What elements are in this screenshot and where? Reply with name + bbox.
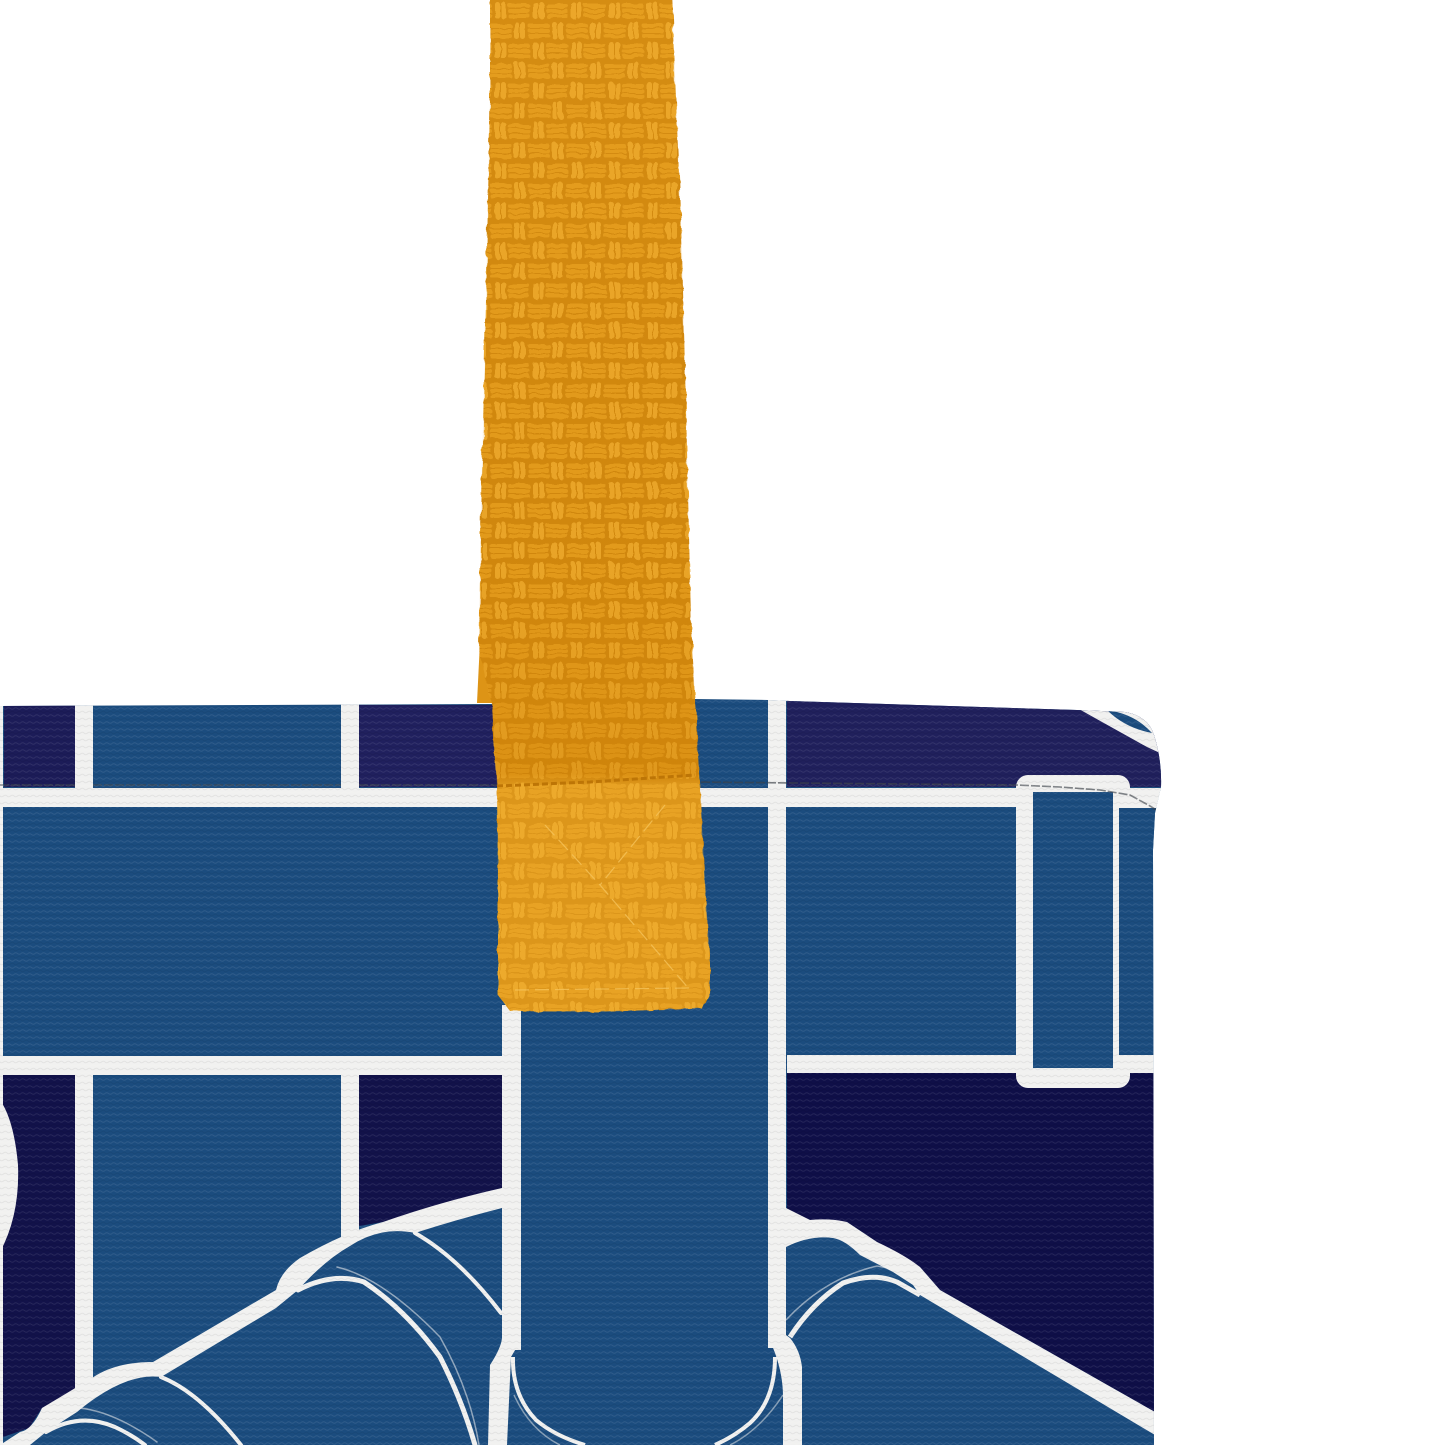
navy panels of the printed pattern: [3, 698, 1180, 1437]
orange handle strap: [477, 0, 710, 1012]
corner ring shape at top right: [1080, 710, 1158, 752]
handle body: [479, 0, 710, 1012]
white printed grid lines: [0, 698, 1160, 1445]
central column base: [488, 1335, 802, 1445]
handle cross stitches: [515, 805, 690, 990]
right figure outline: [786, 1208, 1155, 1435]
bag body: [0, 695, 1180, 1445]
left figure outline: [0, 1188, 502, 1445]
handle fold seam: [497, 775, 695, 786]
buckle rectangle at right: [1016, 775, 1165, 1088]
left white blob: [3, 1105, 18, 1246]
top hem stitch line: [0, 782, 1158, 811]
blue base fabric: [0, 695, 1170, 1445]
handle shadow flap: [477, 500, 496, 703]
handle shading: [479, 0, 710, 1012]
fabric texture: [0, 695, 1170, 1445]
